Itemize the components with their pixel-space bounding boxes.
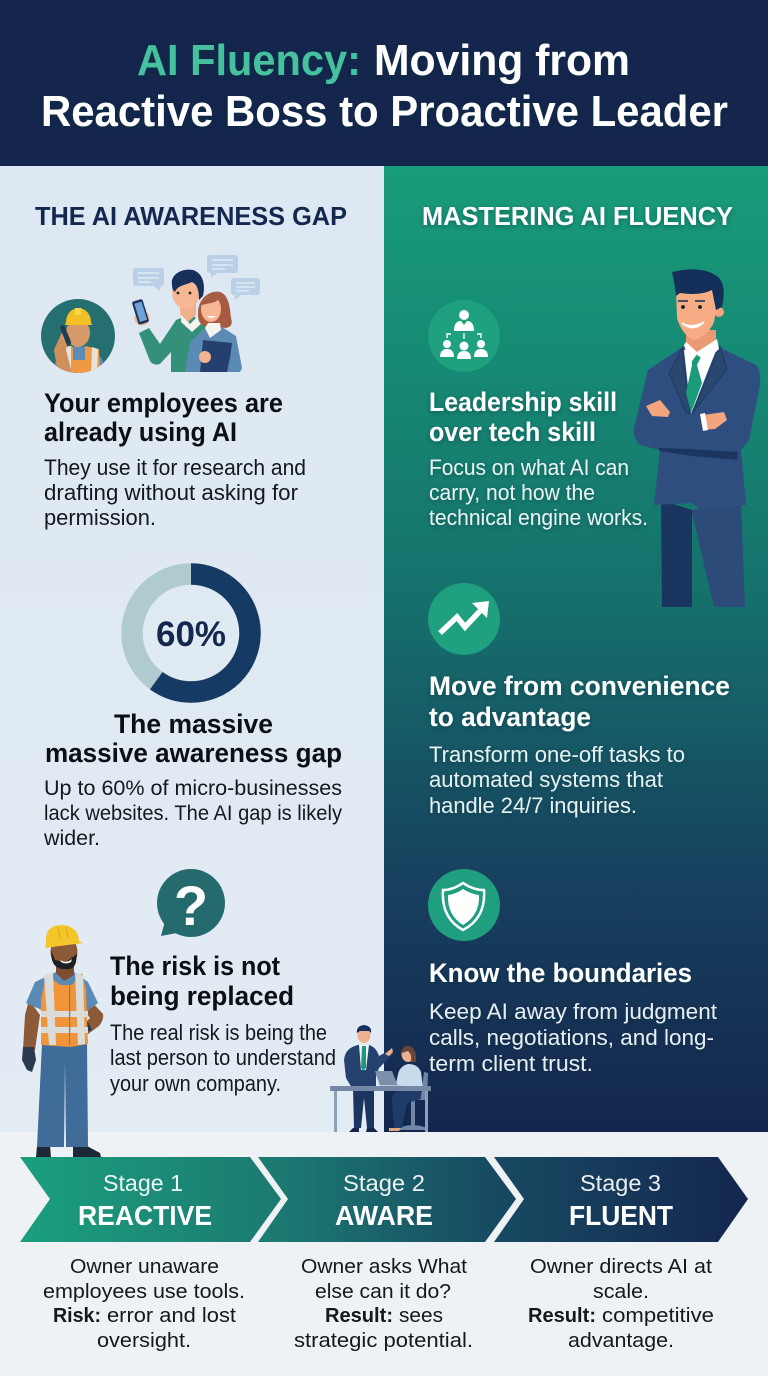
heading: the AI awareness gap: THE AI AWARENESS GAP <box>35 201 347 231</box>
stage 2 label: AWARE <box>335 1200 433 1231</box>
gloves <box>22 1047 36 1072</box>
stage 1 description: Risk: <box>53 1304 101 1327</box>
text: your employees are already using AI: They use it for research and <box>44 455 306 480</box>
text: your employees are already using AI: already using AI <box>44 417 237 447</box>
chat bubbles <box>133 255 260 300</box>
text: the risk is not being replaced: The risk is not <box>110 951 280 981</box>
stage 1 label: REACTIVE <box>78 1200 212 1231</box>
title: AI Fluency: <box>137 36 361 85</box>
woman <box>395 1064 423 1089</box>
text: the risk is not being replaced <box>110 951 336 1096</box>
text: know the boundaries: calls, negotiations, and long- <box>429 1025 714 1050</box>
text: the massive awareness gap: Up to 60% of micro-businesses <box>44 776 342 800</box>
title: Reactive Boss to Proactive Leader <box>41 87 728 136</box>
text: your employees are already using AI: Your employees are <box>44 388 283 418</box>
text: the risk is not being replaced: last person to understand <box>110 1045 336 1070</box>
text: leadership skill <box>429 387 648 530</box>
illustration: confident leader <box>634 269 760 607</box>
stage 3 description: Result: <box>528 1304 596 1327</box>
text: your employees are already using AI <box>44 388 306 530</box>
jacket <box>634 346 760 510</box>
icon: growth arrow <box>428 583 500 655</box>
heading: mastering AI fluency: MASTERING AI FLUENCY <box>422 201 733 231</box>
stage 2 label: Stage 2 <box>343 1170 425 1196</box>
illustration: meeting at desk <box>330 1025 431 1132</box>
right panel background <box>384 166 768 1132</box>
text: know the boundaries: Keep AI away from judgment <box>429 999 718 1024</box>
chair <box>402 1072 428 1100</box>
icon: shield <box>428 869 500 941</box>
text: know the boundaries: term client trust. <box>429 1051 593 1076</box>
stage 1 description: error and lost <box>107 1304 236 1327</box>
text: leadership skill: technical engine works. <box>429 505 648 530</box>
text: move from convenience to advantage <box>429 671 730 818</box>
icon: org chart <box>428 300 500 372</box>
folded arm <box>634 398 748 450</box>
stage 1 description: oversight. <box>97 1329 191 1352</box>
text: move from convenience to advantage: Move from convenience <box>429 671 730 701</box>
text: the massive awareness gap: massive awareness gap <box>45 738 342 768</box>
tie <box>686 353 702 413</box>
text: the massive awareness gap: The massive <box>114 709 273 739</box>
man sweater <box>139 314 206 372</box>
table <box>330 1086 431 1091</box>
shirt <box>684 348 717 414</box>
man <box>353 1088 374 1128</box>
head <box>56 958 74 981</box>
text: move from convenience to advantage: to advantage <box>429 702 591 732</box>
header band <box>0 0 768 166</box>
text: leadership skill: carry, not how the <box>429 480 595 505</box>
head <box>714 307 724 317</box>
stage 3 label: Stage 3 <box>580 1170 661 1196</box>
stage 3 description: scale. <box>593 1280 649 1303</box>
title <box>41 36 728 136</box>
arms <box>23 1000 40 1050</box>
shirt <box>26 972 98 1012</box>
text: the risk is not being replaced: your own company. <box>110 1071 281 1096</box>
man head <box>180 300 196 322</box>
text: your employees are already using AI: permission. <box>44 505 156 530</box>
stage 2 description: sees <box>399 1304 443 1327</box>
text: your employees are already using AI: drafting without asking for <box>44 480 298 505</box>
stage 1 description: Owner unaware <box>70 1255 219 1278</box>
vest <box>41 973 88 1047</box>
stage 3 description: competitive <box>602 1304 714 1327</box>
phone and hand <box>134 310 150 326</box>
text: leadership skill: over tech skill <box>429 417 596 447</box>
donut chart: 60% <box>132 574 250 692</box>
laptop <box>375 1071 398 1086</box>
stage 2 description <box>294 1255 473 1352</box>
bottom band background <box>0 1132 768 1376</box>
trousers <box>37 1044 88 1147</box>
stage 2 description: Owner asks What <box>301 1255 467 1278</box>
left panel background <box>0 166 384 1132</box>
clipboard <box>200 340 232 372</box>
stage 2 description: strategic potential. <box>294 1329 473 1352</box>
stage 2 label <box>335 1170 433 1231</box>
stage 2 description: Result: <box>325 1304 393 1327</box>
woman hair <box>198 292 232 328</box>
text: the risk is not being replaced: being replaced <box>110 981 294 1011</box>
title: Moving from <box>374 36 630 85</box>
text: leadership skill: Leadership skill <box>429 387 617 417</box>
text: the risk is not being replaced: The real risk is being the <box>110 1020 327 1045</box>
icon: question bubble: ? <box>174 874 208 937</box>
stage 3 description: advantage. <box>568 1329 674 1352</box>
chevron stage 3 <box>494 1157 748 1242</box>
legs <box>661 500 692 607</box>
boots <box>36 1146 51 1157</box>
icon: worker on phone badge <box>41 299 115 373</box>
stage 1 description: employees use tools. <box>43 1280 245 1303</box>
woman jacket <box>185 327 242 372</box>
chevron stage 2 <box>258 1157 516 1242</box>
text: the massive awareness gap: wider. <box>43 826 100 850</box>
illustration: standing worker <box>22 925 103 1157</box>
hands <box>646 400 670 417</box>
helmet <box>45 925 83 948</box>
lapels <box>669 346 727 414</box>
text: know the boundaries <box>429 958 718 1076</box>
stage 3 label <box>569 1170 673 1231</box>
stage 1 label <box>78 1170 212 1231</box>
stage 1 label: Stage 1 <box>103 1170 183 1196</box>
illustration: employees using AI <box>132 255 260 372</box>
text: move from convenience to advantage: handle 24/7 inquiries. <box>429 793 637 818</box>
donut chart: 60%: 60% <box>156 615 226 654</box>
stage 3 label: FLUENT <box>569 1200 673 1231</box>
text: the massive awareness gap <box>43 709 342 850</box>
stage 2 description: else can it do? <box>315 1280 451 1303</box>
stage 3 description: Owner directs AI at <box>530 1255 712 1278</box>
text: move from convenience to advantage: automated systems that <box>429 767 664 792</box>
text: the massive awareness gap: lack websites. The AI gap is likely <box>44 801 342 825</box>
collar and neck <box>686 330 716 356</box>
text: move from convenience to advantage: Transform one-off tasks to <box>429 742 685 767</box>
text: leadership skill: Focus on what AI can <box>429 455 629 480</box>
stage 1 description <box>43 1255 245 1352</box>
stage 3 description <box>528 1255 714 1352</box>
icon: question bubble <box>157 869 225 937</box>
text: know the boundaries: Know the boundaries <box>429 958 692 988</box>
chevron stage 1 <box>20 1157 281 1242</box>
